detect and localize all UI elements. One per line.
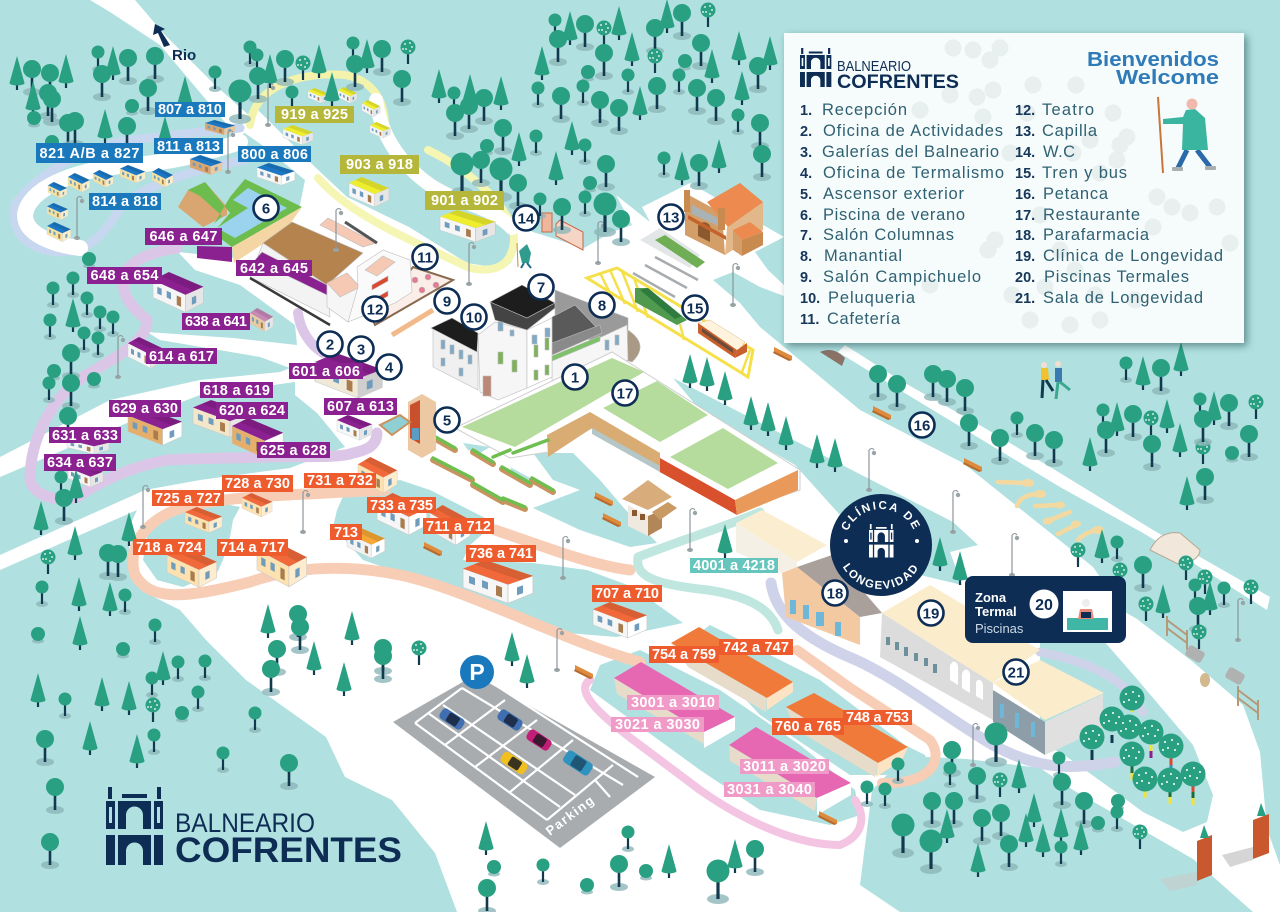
building: w.c. kiosks: [542, 213, 583, 250]
park furniture: fences and benches: [1167, 616, 1258, 720]
room labels: blue zone: [36, 102, 311, 210]
room labels: pink zone: 3021 a 3030: [615, 717, 700, 733]
legend list left column: 1.: [800, 103, 812, 119]
room labels: yellow zone: 901 a 902: [431, 193, 498, 209]
legend list right column: Teatro: [1042, 101, 1094, 119]
trees: south-east grove: [860, 722, 1148, 877]
badge: clinica de longevidad: LONGEVIDAD: [843, 562, 917, 590]
numbered markers on the map: 17: [617, 386, 633, 402]
legend list right column: 19.: [1015, 249, 1035, 265]
numbered markers on the map: 16: [914, 418, 930, 434]
building: salon and theatre complex: [250, 218, 453, 335]
room labels: blue zone: 807 a 810: [158, 102, 222, 118]
room labels: pink zone: [611, 695, 829, 798]
legend list right column: 12.: [1015, 103, 1035, 119]
legend list left column: Oficina de Termalismo: [823, 164, 1004, 182]
panel title: Bienvenidos: [1087, 49, 1219, 71]
panel: legend: [784, 33, 1244, 343]
legend list left column: Salón Campichuelo: [823, 268, 981, 286]
room labels: blue zone: 814 a 818: [92, 194, 158, 210]
entrance brick pillars: [1160, 803, 1269, 891]
parking lot: [393, 675, 655, 848]
room labels: orange zone: 711 a 712: [426, 519, 491, 535]
legend list right column: Clínica de Longevidad: [1043, 247, 1223, 265]
legend list left column: 2.: [800, 124, 812, 140]
room labels: purple zone: 631 a 633: [52, 428, 118, 444]
room labels: orange zone: 713: [334, 525, 358, 541]
badge: clinica de longevidad: CLÍNICA DE: [842, 501, 920, 530]
legend list right column: Piscinas Termales: [1044, 268, 1189, 286]
room labels: purple zone: 607 a 613: [327, 399, 394, 415]
room labels: pink zone: 3001 a 3010: [631, 695, 715, 711]
numbered markers on the map: 19: [923, 606, 939, 622]
legend list right column: W.C: [1043, 143, 1075, 161]
stairs to the chapel: [633, 228, 705, 297]
legend list left column: 9.: [800, 270, 812, 286]
room labels: purple zone: 642 a 645: [240, 261, 308, 277]
tunnel bridge on promenade: [820, 350, 1200, 565]
callout: zona termal: 20: [1035, 597, 1053, 614]
legend list left column: 11.: [800, 312, 819, 328]
room labels: purple zone: 601 a 606: [292, 364, 360, 380]
room labels: purple zone: 614 a 617: [149, 349, 214, 365]
room labels: orange zone: 731 a 732: [307, 473, 373, 489]
legend list left column: Salón Columnas: [823, 226, 954, 244]
legend list right column: 15.: [1015, 166, 1035, 182]
room labels: yellow zone: 903 a 918: [346, 157, 413, 173]
logo: balneario cofrentes large: BALNEARIO: [175, 808, 315, 838]
callout: zona termal: Piscinas: [975, 621, 1024, 636]
trees: decorated orchard with coloured trunks: [1080, 686, 1206, 805]
numbered markers on the map: 3: [357, 342, 365, 358]
trees: south-west woods: [30, 252, 298, 869]
room labels: purple zone: 620 a 624: [219, 403, 285, 419]
benches: [423, 347, 982, 825]
legend list left column: Galerías del Balneario: [822, 143, 999, 161]
legend list left column: Oficina de Actividades: [823, 122, 1003, 140]
numbered markers on the map: 4: [385, 360, 394, 376]
parking lot: Parking: [543, 793, 597, 838]
icon: parking sign: [460, 655, 494, 689]
trees: north woods: [450, 0, 778, 246]
panel logo: BALNEARIO: [837, 59, 911, 75]
trees: north-west woods: [10, 36, 464, 153]
coloured halos along zones: [14, 75, 1143, 845]
building: restaurant with green roofs: [455, 352, 800, 515]
legend list left column: 4.: [800, 166, 812, 182]
legend list left column: 5.: [800, 187, 812, 203]
building rows: orange apartments: [671, 627, 908, 777]
room labels: orange zone: 736 a 741: [469, 546, 533, 562]
room labels: orange zone: 718 a 724: [136, 540, 202, 556]
panel hiker illustration: [1158, 97, 1216, 173]
legend list left column: 6.: [800, 208, 812, 224]
houses: orange zone: [167, 457, 647, 638]
room labels: orange zone: 733 a 735: [370, 498, 433, 514]
north promenade road: [838, 345, 1270, 610]
legend list right column: 21.: [1015, 291, 1035, 307]
houses: yellow zone: [283, 87, 495, 242]
houses: purple zone: [67, 272, 382, 487]
legend list right column: 18.: [1015, 228, 1035, 244]
terraces and green planters: [432, 435, 553, 509]
room labels: blue zone: 800 a 806: [241, 147, 308, 163]
room labels: orange zone: 760 a 765: [775, 719, 841, 735]
panel title: Welcome: [1116, 67, 1219, 89]
legend list right column: Parafarmacia: [1043, 226, 1150, 244]
building: piscina de verano: [178, 179, 302, 263]
legend list right column: Capilla: [1042, 122, 1098, 140]
trees: parking surroundings: [260, 604, 764, 912]
building rows: pink apartments: [614, 662, 851, 815]
room labels: purple zone: 648 a 654: [90, 268, 158, 284]
numbered markers on the map: 15: [687, 300, 703, 318]
legend list left column: [800, 101, 1004, 328]
numbered markers on the map: 5: [443, 412, 451, 430]
room labels: orange zone: 714 a 717: [220, 540, 285, 556]
icon: parking sign: P: [469, 659, 485, 685]
numbered markers on the map: 21: [1008, 664, 1024, 682]
badge: clinica de longevidad: [830, 494, 932, 596]
legend list left column: 3.: [800, 145, 812, 161]
figure: hiker near w.c.: [517, 243, 531, 268]
panel logo: [800, 48, 959, 93]
room labels: purple zone: 638 a 641: [185, 314, 247, 330]
legend list right column: 17.: [1015, 208, 1035, 224]
street lamps: [74, 84, 1245, 767]
legend list left column: Recepción: [822, 101, 907, 119]
legend list left column: Peluqueria: [828, 289, 916, 307]
room label: clinic zone: 4001 a 4218: [693, 558, 775, 574]
legend list right column: Petanca: [1043, 185, 1109, 203]
train and bus area with yellow hatching: [587, 268, 753, 377]
legend list right column: 13.: [1015, 124, 1035, 140]
room labels: blue zone: 821 A/B a 827: [40, 146, 140, 162]
room labels: yellow zone: [275, 106, 504, 210]
panel background ghost trees: [912, 40, 1238, 334]
legend list left column: Piscina de verano: [823, 206, 965, 224]
figure: walking couple: [1041, 361, 1070, 399]
building: restaurante annex house: [622, 480, 677, 536]
numbered markers on the map: 18: [827, 586, 843, 602]
room labels: purple zone: 625 a 628: [260, 443, 327, 459]
room labels: pink zone: 3031 a 3040: [727, 782, 812, 798]
yellow zone road and blue loop road: [25, 100, 512, 248]
legend list right column: [1015, 101, 1223, 307]
teal islands: [143, 150, 1253, 912]
legend list left column: Ascensor exterior: [823, 185, 964, 203]
room labels: purple zone: 629 a 630: [112, 401, 178, 417]
callout: zona termal: Zona: [975, 590, 1007, 605]
panel title: [1087, 49, 1219, 89]
trees: east meadow: [869, 342, 1264, 649]
river direction arrow: [153, 24, 196, 64]
numbered markers on the map: 8: [598, 298, 606, 314]
legend list left column: Cafetería: [827, 310, 901, 328]
legend list right column: 16.: [1015, 187, 1035, 203]
river road: [90, 0, 252, 140]
room labels: orange zone: 748 a 753: [846, 710, 909, 726]
building: hotel centre: [431, 285, 640, 400]
numbered markers on the map: 10: [466, 310, 482, 326]
legend list left column: Manantial: [824, 247, 902, 265]
numbered markers on the map: 12: [367, 302, 383, 318]
room labels: blue zone: 811 a 813: [157, 139, 220, 155]
callout: zona termal: [965, 576, 1126, 643]
room labels: purple zone: 634 a 637: [47, 455, 113, 471]
room labels: purple zone: 646 a 647: [150, 229, 218, 245]
room labels: orange zone: 742 a 747: [723, 640, 789, 656]
numbered markers on the map: 2: [326, 336, 334, 354]
building: ascensor exterior tower: [380, 394, 436, 458]
room labels: orange zone: 707 a 710: [595, 586, 659, 602]
logo: balneario cofrentes large: COFRENTES: [175, 831, 402, 870]
numbered markers on the map: 11: [417, 250, 433, 266]
room labels: yellow zone: 919 a 925: [281, 107, 348, 123]
room labels: orange zone: 725 a 727: [155, 491, 221, 507]
legend list right column: Sala de Longevidad: [1043, 289, 1203, 307]
room labels: orange zone: 728 a 730: [225, 476, 290, 492]
room labels: pink zone: 3011 a 3020: [743, 759, 826, 775]
legend list left column: 10.: [800, 291, 820, 307]
legend list right column: Tren y bus: [1042, 164, 1127, 182]
room labels: purple zone: [44, 228, 397, 471]
numbered markers on the map: 6: [262, 200, 270, 218]
legend list right column: 20.: [1015, 270, 1035, 286]
building: clinica complex: [736, 510, 1104, 755]
numbered markers on the map: 1: [571, 370, 579, 386]
building: capilla: [684, 183, 763, 256]
legend list right column: 14.: [1015, 145, 1035, 161]
room labels: purple zone: 618 a 619: [203, 383, 270, 399]
legend list right column: Restaurante: [1043, 206, 1140, 224]
room labels: orange zone: [133, 473, 912, 735]
numbered markers on the map: 14: [518, 210, 535, 228]
trees: central strip: [504, 354, 968, 688]
mini golf course: [998, 479, 1104, 540]
houses: blue zone: [47, 120, 295, 242]
logo: balneario cofrentes large: [106, 787, 402, 870]
callout: zona termal: Termal: [975, 604, 1017, 619]
legend list left column: 7.: [800, 228, 812, 244]
numbered markers on the map: 13: [663, 210, 679, 226]
numbered markers on the map: 7: [537, 280, 545, 296]
panel logo: COFRENTES: [837, 72, 959, 93]
numbered markers on the map: 9: [443, 294, 451, 310]
numbered markers on the map: [254, 196, 1028, 684]
room labels: orange zone: 754 a 759: [652, 647, 716, 663]
legend list left column: 8.: [800, 249, 812, 265]
river direction arrow: Rio: [172, 47, 196, 64]
